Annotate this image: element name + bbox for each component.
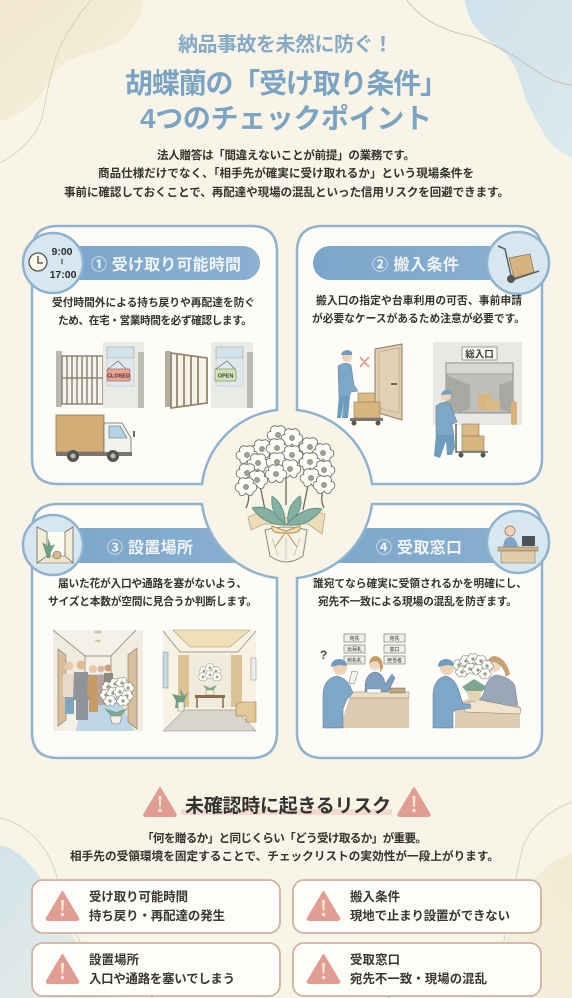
title [125,32,448,134]
icon: clock badge: ≀ [60,257,64,266]
panel: 受け取り可能時間: ため、在宅・営業時間を必ず確認します。 [58,314,252,327]
center orchid [235,426,335,562]
main title line 2: 4つのチェックポイント [140,103,432,134]
main title line 1: 胡蝶蘭の「受け取り条件」 [125,68,448,99]
risk description: 「何を贈るか」と同じくらい「どう受け取るか」が重要。 [142,831,427,845]
body text: 届いた花が入口や通路を塞がないよう、 [58,577,247,590]
illustration: lobby [163,630,256,731]
risk card: 設置場所: 設置場所 [89,952,140,967]
illustration: confused reception: 宛先 [349,635,360,642]
illustration: confused reception: 宛名札 [347,657,362,664]
panel: 設置場所: サイズと本数が空間に見合うか判断します。 [48,595,257,608]
panel: 受取窓口 [296,504,549,758]
panel: 受取窓口: 宛先不一致による現場の混乱を防ぎます。 [318,595,517,608]
panel: 設置場所 [23,504,278,758]
risk card: 搬入条件: 搬入条件 [350,889,400,904]
illustration: successful reception [433,654,521,728]
illustration: closed gate: CLOSED [107,374,130,380]
icon: clock badge: 9:00 [51,246,73,258]
icon: clock badge [23,233,83,293]
icon: warning [308,955,339,983]
flower blossoms [235,426,335,496]
icon: warning left [144,788,176,816]
illustration: truck [56,415,135,462]
risk card: 受け取り可能時間: 受け取り可能時間 [89,889,188,904]
risk card: 設置場所 [32,943,280,996]
intro text: 商品仕様だけでなく、「相手先が確実に受け取れるか」という現場条件を [98,166,474,180]
icon: warning [308,892,339,920]
heading pill [313,246,523,280]
wrapping paper [248,510,325,534]
illustration: confused reception: 窓口 [389,646,400,653]
illustration: confused reception [320,634,409,728]
illustration: open gate [165,342,253,408]
heading band [338,528,494,563]
icon: room corner badge [23,515,83,575]
corridor orchid [100,678,134,724]
intro text: 事前に確認しておくことで、再配達や現場の混乱といった信用リスクを回避できます。 [64,185,509,199]
bouquet [453,654,493,701]
icon: hand truck badge [487,232,549,294]
icon: reception badge [487,511,549,573]
subtitle: 納品事故を未然に防ぐ！ [178,32,393,56]
illustration: confused reception: 出荷札 [347,646,362,653]
risk card: 受け取り可能時間 [32,880,280,933]
lobby orchid [198,664,222,695]
icon: warning [47,892,78,920]
illustration: loading entrance: 総入口 [465,348,494,360]
risk heading: 未確認時に起きるリスク [185,795,391,817]
risk description: 相手先の受領環境を固定することで、チェックリストの実効性が一段上がります。 [70,849,499,863]
risk card: 受取窓口 [293,943,541,996]
risk heading [144,788,430,817]
heading text: ② 搬入条件 [372,255,459,274]
risk card: 受取窓口: 受取窓口 [350,952,400,967]
panel: 受け取り可能時間 [23,226,277,484]
risk card: 受け取り可能時間: 持ち戻り・再配達の発生 [89,908,225,923]
illustration: confused reception: 担当者 [387,657,402,664]
intro text: 法人贈答は「間違えないことが前提」の業務です。 [157,148,415,162]
leaves [252,496,322,525]
risk description [70,831,499,863]
illustration: closed gate [56,342,144,408]
icon: clock badge: 17:00 [50,269,77,281]
corridor people [63,660,113,720]
risk card: 設置場所: 入口や通路を塞いでしまう [89,971,235,986]
risk card: 搬入条件: 現地で止まり設置ができない [350,908,510,923]
illustration: crowded corridor [53,630,143,731]
risk card: 搬入条件 [293,880,541,933]
heading pill [58,246,260,280]
icon: warning [47,955,78,983]
flower stems [246,460,324,510]
body text: 搬入口の指定や台車利用の可否、事前申請 [316,294,522,307]
intro text [64,148,509,199]
risk card: 受取窓口: 宛先不一致・現場の混乱 [350,971,488,986]
heading text: ④ 受取窓口 [376,538,462,557]
illustration: confused reception: 宛先 [389,635,400,642]
heading band [78,528,236,563]
illustration: worker at door [337,344,402,426]
illustration: loading entrance [433,342,522,458]
vase [265,527,307,562]
illustration: confused reception: ? [320,648,327,662]
heading text: ① 受け取り可能時間 [91,255,241,274]
icon: warning right [398,788,430,816]
panel: 搬入条件: が必要なケースがあるため注意が必要です。 [312,312,525,325]
body text: 受付時間外による持ち戻りや再配達を防ぐ [52,296,255,309]
ribbon bow [272,526,300,547]
heading text: ③ 設置場所 [107,539,193,557]
body text: 誰宛てなら確実に受領されるかを明確にし、 [313,577,527,590]
illustration: open gate: OPEN [218,374,233,380]
panel: 搬入条件 [297,226,549,484]
